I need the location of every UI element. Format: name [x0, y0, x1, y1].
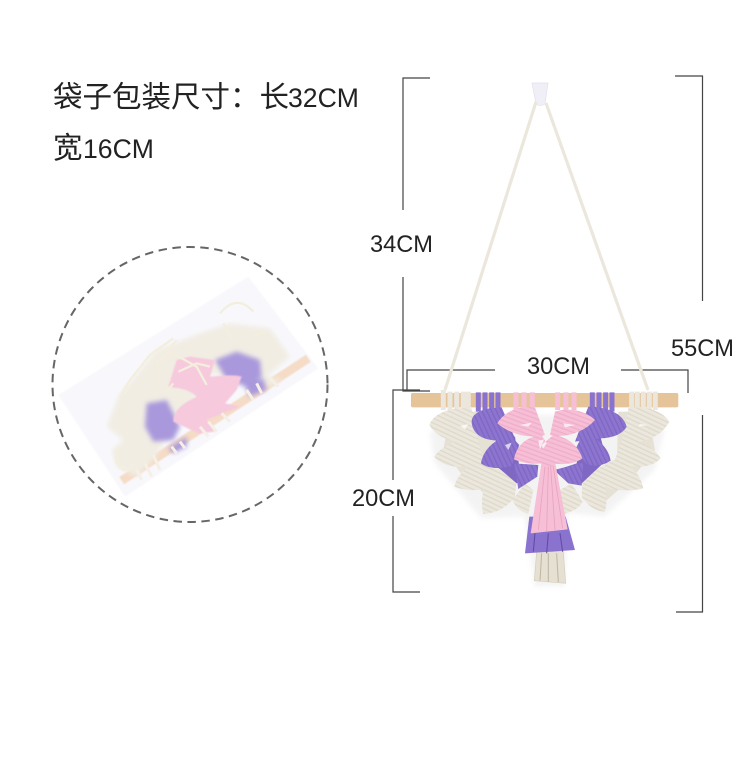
pink hanging cords	[516, 392, 574, 410]
cream tassel strands	[540, 553, 558, 582]
frosted bag with contents	[58, 277, 318, 497]
macrame wall hanging	[411, 390, 678, 587]
hanging fringe	[137, 378, 278, 480]
wooden rod	[411, 393, 678, 407]
label 34CM: 34CM	[370, 232, 433, 258]
text: bag width: 宽	[53, 132, 83, 165]
pink tassel	[531, 462, 568, 533]
hanging rope	[445, 102, 648, 390]
label 55CM: 55CM	[671, 336, 734, 362]
cream leaves right	[560, 407, 669, 514]
pink leaves	[497, 407, 595, 464]
blurred wooden rod	[122, 358, 308, 481]
title: bag size	[53, 81, 359, 165]
pink tassel strands	[538, 467, 563, 532]
purple leaves	[472, 407, 627, 489]
cream hanging cords	[443, 390, 655, 410]
dashed circle outline	[52, 247, 328, 522]
text: bag width: 16CM	[83, 134, 154, 164]
purple tassel	[525, 517, 575, 553]
pink knot	[540, 441, 557, 467]
leaf gaps	[460, 423, 648, 450]
dimension: 20CM	[352, 390, 420, 592]
dimension: 30CM	[407, 354, 688, 393]
pink leaves	[168, 357, 242, 433]
purple tassel strands	[533, 533, 563, 553]
bag	[58, 277, 318, 497]
label 30CM: 30CM	[527, 354, 590, 380]
dashed circle with packaged product	[52, 247, 328, 522]
label 20CM: 20CM	[352, 486, 415, 512]
soft shadow	[430, 415, 665, 587]
loose cords	[116, 303, 267, 470]
cream leaves left	[429, 408, 533, 514]
dimension: 55CM	[671, 76, 734, 612]
text: bag length: 32CM	[288, 83, 359, 113]
cream tassel	[534, 552, 566, 583]
dimension: 34CM	[370, 78, 433, 391]
purple backing between leaves	[493, 433, 607, 483]
text: bag length: 袋子包装尺寸：长	[53, 81, 289, 114]
wall hook	[532, 83, 548, 106]
blurred cream leaves	[107, 323, 290, 477]
cream backing between leaves	[443, 412, 655, 503]
purple hanging cords	[478, 392, 612, 412]
blurred purple leaves	[145, 352, 267, 453]
